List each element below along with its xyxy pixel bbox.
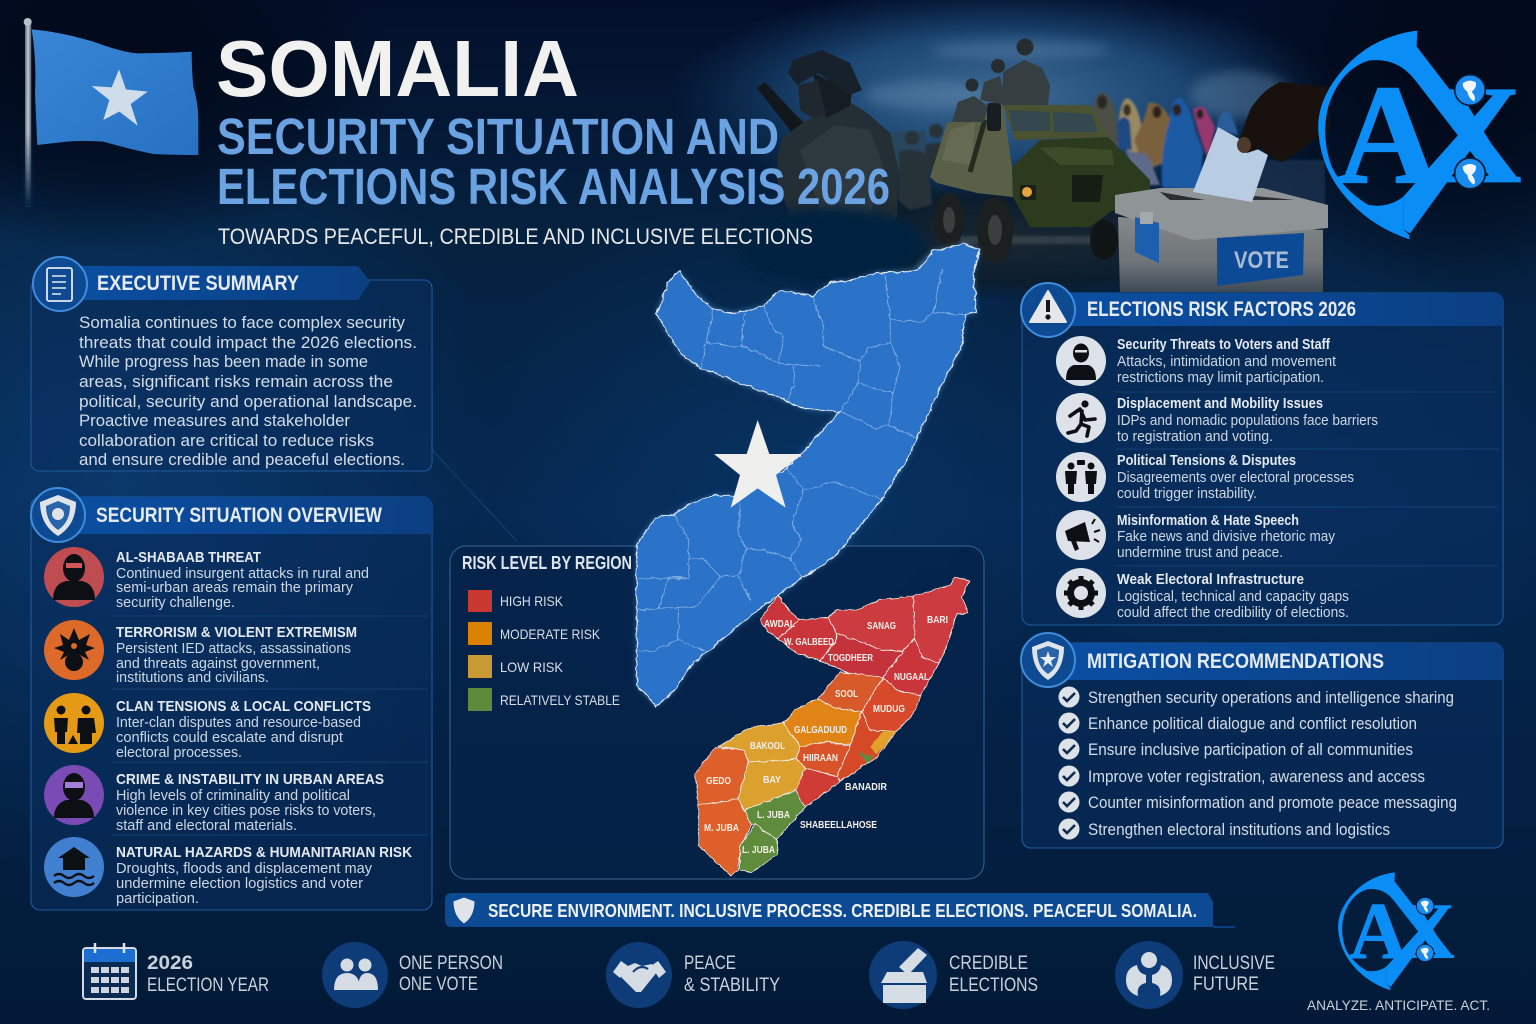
title: TOWARDS PEACEFUL, CREDIBLE AND INCLUSIVE ELECTIONS xyxy=(218,224,813,249)
legend xyxy=(468,590,620,711)
title xyxy=(216,24,890,249)
item: al-shabaab threat: semi-urban areas remain the primary xyxy=(116,580,354,596)
legend: RELATIVELY STABLE xyxy=(500,692,620,708)
footer: one person one vote xyxy=(322,942,503,1008)
check list: Ensure inclusive participation of all communities xyxy=(1088,741,1413,759)
item: crime and instability xyxy=(44,765,384,834)
item: security threats: Security Threats to Voters and Staff xyxy=(1117,337,1330,353)
icon: document xyxy=(33,257,87,311)
heading: mitigation recommendations: MITIGATION RECOMMENDATIONS xyxy=(1087,650,1384,673)
item: natural hazards: NATURAL HAZARDS & HUMANITARIAN RISK xyxy=(116,844,412,861)
icon: megaphone xyxy=(1056,510,1106,560)
icon: shield with star xyxy=(1021,633,1075,687)
AX logo small with tagline: A xyxy=(1349,888,1407,976)
item: misinformation: undermine trust and peace. xyxy=(1117,545,1283,561)
item: terrorism and violent extremism xyxy=(44,620,357,686)
region labels: W. GALBEED xyxy=(784,636,834,648)
item: clan tensions: electoral processes. xyxy=(116,745,242,761)
region labels: L. JUBA xyxy=(757,809,790,821)
panel: elections risk factors xyxy=(1021,283,1503,625)
soldiers on vehicle xyxy=(952,38,1050,122)
footer: inclusive future xyxy=(1115,941,1275,1009)
icon: explosion xyxy=(44,620,104,680)
region labels: MUDUG xyxy=(873,703,905,715)
legend: MODERATE RISK xyxy=(500,626,601,642)
check list: Strengthen security operations and intelligence sharing xyxy=(1088,689,1454,707)
icon: white star on map xyxy=(714,420,802,508)
ballot box xyxy=(1115,160,1328,292)
Somali flag xyxy=(23,18,198,207)
item: weak infrastructure: Weak Electoral Infrastructure xyxy=(1117,572,1304,588)
map: Somalia in flag blue xyxy=(637,243,980,706)
item: political tensions xyxy=(1056,452,1354,502)
region labels: GALGADUUD xyxy=(794,724,847,736)
icon: two people talking xyxy=(1056,452,1106,502)
item: weak infrastructure: Logistical, technical and capacity gaps xyxy=(1117,589,1349,605)
mitigation header ribbon xyxy=(1055,643,1503,680)
panel: executive summary xyxy=(31,257,432,471)
region labels: AWDAL xyxy=(764,618,795,630)
risk factors header ribbon xyxy=(1055,293,1503,326)
footer: credible elections xyxy=(869,941,1038,1009)
item: clan tensions: Inter-clan disputes and resource-based xyxy=(116,715,361,731)
executive summary text: Proactive measures and stakeholder xyxy=(79,411,350,430)
heading: security situation overview: SECURITY SITUATION OVERVIEW xyxy=(96,504,382,527)
item: misinformation: Misinformation & Hate Speech xyxy=(1117,513,1299,529)
item: security threats: restrictions may limit participation. xyxy=(1117,370,1324,386)
region labels: BARI xyxy=(927,614,948,626)
item: displacement: Displacement and Mobility Issues xyxy=(1117,396,1323,412)
title: ELECTIONS RISK ANALYSIS 2026 xyxy=(217,158,890,215)
region labels xyxy=(704,614,948,856)
icon: two figures xyxy=(44,693,104,753)
check list: Improve voter registration, awareness and access xyxy=(1088,768,1425,786)
footer: credible elections: ELECTIONS xyxy=(949,975,1038,996)
title: SECURITY SITUATION AND xyxy=(217,108,779,165)
icon: two people xyxy=(334,958,378,990)
item: misinformation xyxy=(1056,510,1336,561)
item: clan tensions: CLAN TENSIONS & LOCAL CONFLICTS xyxy=(116,698,371,715)
distant soldiers xyxy=(898,124,946,210)
icon: running person xyxy=(1056,393,1106,443)
icon: flooded house xyxy=(44,837,104,897)
armoured vehicle xyxy=(930,103,1150,263)
item: crime and instability: High levels of criminality and political xyxy=(116,788,350,804)
check list: Enhance political dialogue and conflict resolution xyxy=(1088,715,1417,733)
executive summary text: political, security and operational landscape. xyxy=(79,392,417,411)
region labels: HIIRAAN xyxy=(803,752,838,764)
item: natural hazards: Droughts, floods and displacement may xyxy=(116,861,373,877)
item: al-shabaab threat xyxy=(44,547,369,611)
item: al-shabaab threat: AL-SHABAAB THREAT xyxy=(116,549,261,566)
region labels: L. JUBA xyxy=(742,844,775,856)
AX logo large: A xyxy=(1337,55,1438,213)
legend: HIGH RISK xyxy=(500,593,564,609)
item: displacement: to registration and voting. xyxy=(1117,429,1273,445)
footer: peace and stability xyxy=(606,942,780,1008)
check list xyxy=(1058,686,1457,840)
icon: shield xyxy=(31,488,85,542)
hero photo: soldiers, armoured vehicle, voters and ballot box xyxy=(670,0,1330,300)
item: political tensions: could trigger instability. xyxy=(1117,486,1257,502)
item: misinformation: Fake news and divisive rhetoric may xyxy=(1117,529,1336,545)
item: weak infrastructure: could affect the credibility of elections. xyxy=(1117,605,1349,621)
security header ribbon xyxy=(60,497,432,534)
item: terrorism and violent extremism: Persistent IED attacks, assassinations xyxy=(116,641,351,657)
item: political tensions: Political Tensions & Disputes xyxy=(1117,453,1296,469)
icon: handshake xyxy=(613,961,666,992)
footer: inclusive future: FUTURE xyxy=(1193,974,1259,995)
item: security threats xyxy=(1056,336,1336,386)
ballot box: VOTE xyxy=(1234,247,1289,274)
footer: credible elections: CREDIBLE xyxy=(949,953,1028,974)
legend: LOW RISK xyxy=(500,659,564,675)
item: al-shabaab threat: Continued insurgent attacks in rural and xyxy=(116,566,369,582)
icon: gear xyxy=(1056,568,1106,618)
item: natural hazards: participation. xyxy=(116,891,199,907)
executive summary text: Somalia continues to face complex security xyxy=(79,313,405,332)
check list: Counter misinformation and promote peace messaging xyxy=(1088,794,1457,812)
footer: one person one vote: ONE PERSON xyxy=(399,953,503,974)
AX logo small with tagline xyxy=(1307,872,1490,1013)
footer: one person one vote: ONE VOTE xyxy=(399,974,478,995)
item: al-shabaab threat: security challenge. xyxy=(116,595,235,611)
icon: calendar xyxy=(83,943,136,999)
connector line from summary to risk panel xyxy=(432,450,517,541)
heading: executive summary: EXECUTIVE SUMMARY xyxy=(97,272,299,295)
footer: peace and stability: PEACE xyxy=(684,953,736,974)
item: clan tensions xyxy=(44,693,371,761)
foreground soldier xyxy=(735,50,925,283)
item: clan tensions: conflicts could escalate and disrupt xyxy=(116,730,343,746)
region labels: BAY xyxy=(763,774,781,786)
AX logo small with tagline: X xyxy=(1399,888,1455,976)
item: crime and instability: staff and electoral materials. xyxy=(116,818,297,834)
item: terrorism and violent extremism: and threats against government, xyxy=(116,656,320,672)
icon: people embrace xyxy=(1126,952,1172,996)
heading: risk level by region: RISK LEVEL BY REGION xyxy=(462,553,632,573)
item: natural hazards xyxy=(44,837,412,907)
item: crime and instability: CRIME & INSTABILITY IN URBAN AREAS xyxy=(116,771,384,788)
panel: mitigation recommendations xyxy=(1021,633,1503,848)
item: natural hazards: undermine election logistics and voter xyxy=(116,876,363,892)
item: terrorism and violent extremism: TERRORISM & VIOLENT EXTREMISM xyxy=(116,624,357,641)
executive summary text: and ensure credible and peaceful elections. xyxy=(79,450,405,469)
ballot paper and hand xyxy=(1193,82,1330,202)
crowd of voters xyxy=(1087,92,1238,190)
region labels: M. JUBA xyxy=(704,822,739,834)
panel: risk level by region xyxy=(450,546,984,879)
footer: peace and stability: & STABILITY xyxy=(684,975,780,996)
footer: inclusive future: INCLUSIVE xyxy=(1193,953,1275,974)
executive summary text: areas, significant risks remain across the xyxy=(79,372,393,391)
item: displacement xyxy=(1056,393,1378,445)
footer: election year: 2026 xyxy=(147,953,193,974)
item: security threats: Attacks, intimidation and movement xyxy=(1117,354,1336,370)
icon: banner shield xyxy=(453,897,475,924)
executive summary text: collaboration are critical to reduce risks xyxy=(79,431,374,450)
icon: masked fighter red xyxy=(44,547,104,607)
item: political tensions: Disagreements over electoral processes xyxy=(1117,470,1354,486)
executive summary text: threats that could impact the 2026 elections. xyxy=(79,333,417,352)
slogan banner: SECURE ENVIRONMENT. INCLUSIVE PROCESS. CREDIBLE ELECTIONS. PEACEFUL SOMALIA. xyxy=(488,901,1197,921)
executive summary text xyxy=(79,313,417,469)
footer: election year xyxy=(83,943,269,999)
region labels: BAKOOL xyxy=(750,740,785,752)
icon: masked person xyxy=(1056,336,1106,386)
tagline: ANALYZE. ANTICIPATE. ACT. xyxy=(1307,997,1490,1013)
region labels: BANADIR xyxy=(845,781,887,793)
item: crime and instability: violence in key cities pose risks to voters, xyxy=(116,803,376,819)
region labels: GEDO xyxy=(706,775,731,787)
item: displacement: IDPs and nomadic populations face barriers xyxy=(1117,413,1378,429)
item: weak infrastructure xyxy=(1056,568,1349,621)
executive summary text: While progress has been made in some xyxy=(79,352,368,371)
region labels: SANAG xyxy=(867,620,896,632)
AX logo large: X xyxy=(1425,55,1522,213)
executive summary ribbon xyxy=(62,266,370,300)
item: terrorism and violent extremism: institutions and civilians. xyxy=(116,670,269,686)
region labels: SOOL xyxy=(835,688,858,700)
AX logo large xyxy=(1318,31,1522,239)
region labels: TOGDHEER xyxy=(828,652,873,664)
icon: ballot box and tick xyxy=(881,948,927,1003)
footer: election year: ELECTION YEAR xyxy=(147,975,269,996)
check list: Strengthen electoral institutions and logistics xyxy=(1088,821,1390,839)
map: risk by region choropleth xyxy=(695,577,969,875)
icon: masked criminal purple xyxy=(44,765,104,825)
slogan banner xyxy=(445,893,1235,927)
title: SOMALIA xyxy=(216,24,579,113)
region labels: NUGAAL xyxy=(894,671,929,683)
heading: elections risk factors: ELECTIONS RISK FACTORS 2026 xyxy=(1087,298,1356,321)
panel: security situation overview xyxy=(31,488,432,910)
icon: warning triangle xyxy=(1021,283,1075,337)
region labels: SHABEELLAHOSE xyxy=(800,819,877,831)
